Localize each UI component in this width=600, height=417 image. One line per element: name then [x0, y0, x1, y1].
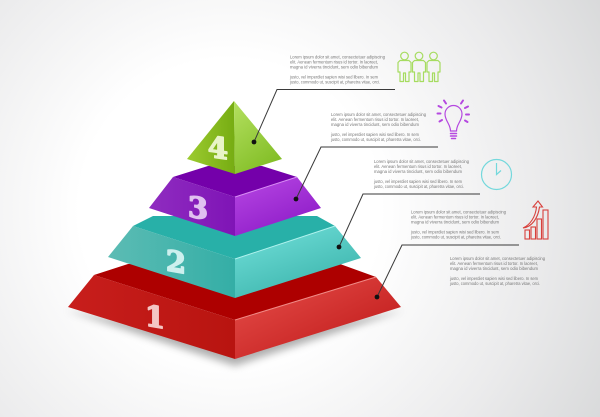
text block 4: justo, commodo ut, suscipit at, pharetra vitae, orci. — [410, 234, 501, 240]
text block 3 — [373, 159, 469, 189]
icon: growth chart — [523, 201, 548, 239]
text block 3: justo, vel imperdiet sapien wisi sed libero. In sem — [373, 179, 462, 184]
icon: light bulb — [438, 100, 469, 138]
text block 1: magna id viverra tincidunt, sem odio bibendum — [290, 64, 378, 70]
pyramid — [66, 101, 404, 366]
icon: three people — [398, 52, 440, 82]
tier 4: green — [187, 101, 282, 174]
text block 1: elit. Aenean fermentum risus id tortor. In laoreet, — [290, 60, 378, 64]
number 1: 1 — [145, 298, 165, 336]
text block 2: justo, vel imperdiet sapien wisi sed libero. In sem — [330, 132, 419, 137]
text block 1 — [289, 54, 385, 84]
icon: clock — [482, 160, 512, 190]
text block 2: Lorem ipsum dolor sit amet, consectetuer adipiscing — [331, 112, 426, 117]
leader line 2 — [337, 194, 480, 249]
text block 3: magna id viverra tincidunt, sem odio bibendum — [374, 169, 462, 174]
text block 5: magna id viverra tincidunt, sem odio bibendum — [450, 266, 538, 271]
text block 5: justo, commodo ut, suscipit at, pharetra vitae, orci. — [449, 281, 540, 286]
text block 4 — [410, 210, 506, 240]
text block 5: justo, vel imperdiet sapien wisi sed libero. In sem — [449, 276, 538, 281]
text block 2: elit. Aenean fermentum risus id tortor. In laoreet, — [331, 117, 419, 122]
text block 1: Lorem ipsum dolor sit amet, consectetuer adipiscing — [290, 54, 385, 60]
tier 2: teal — [108, 216, 361, 298]
leader line 4 — [252, 90, 395, 144]
text block 5 — [449, 256, 545, 286]
number 4: 4 — [208, 130, 228, 166]
number 3: 3 — [188, 190, 208, 226]
text block 5: Lorem ipsum dolor sit amet, consectetuer adipiscing — [450, 256, 545, 261]
text block 2: magna id viverra tincidunt, sem odio bibendum — [331, 122, 419, 127]
number 2: 2 — [166, 243, 186, 281]
text block 4: elit. Aenean fermentum risus id tortor. In laoreet, — [411, 214, 499, 220]
text block 4: justo, vel imperdiet sapien wisi sed libero. In sem — [410, 230, 499, 234]
text block 4: Lorem ipsum dolor sit amet, consectetuer adipiscing — [411, 210, 506, 214]
text block 3: Lorem ipsum dolor sit amet, consectetuer adipiscing — [374, 159, 469, 164]
text block 2: justo, commodo ut, suscipit at, pharetra vitae, orci. — [330, 137, 421, 142]
tier 3: purple — [149, 166, 321, 236]
text block 3: elit. Aenean fermentum risus id tortor. In laoreet, — [374, 164, 462, 169]
tier 1: red — [66, 264, 404, 366]
text block 5: elit. Aenean fermentum risus id tortor. In laoreet, — [450, 261, 538, 266]
text block 4: magna id viverra tincidunt, sem odio bibendum — [411, 220, 499, 224]
text block 1: justo, commodo ut, suscipit at, pharetra vitae, orci. — [289, 80, 380, 84]
leader line 3 — [294, 147, 438, 201]
text block 3: justo, commodo ut, suscipit at, pharetra vitae, orci. — [373, 184, 464, 189]
text block 1: justo, vel imperdiet sapien wisi sed libero. In sem — [289, 74, 378, 80]
leader line 1 — [375, 245, 519, 299]
text block 2 — [330, 112, 426, 142]
